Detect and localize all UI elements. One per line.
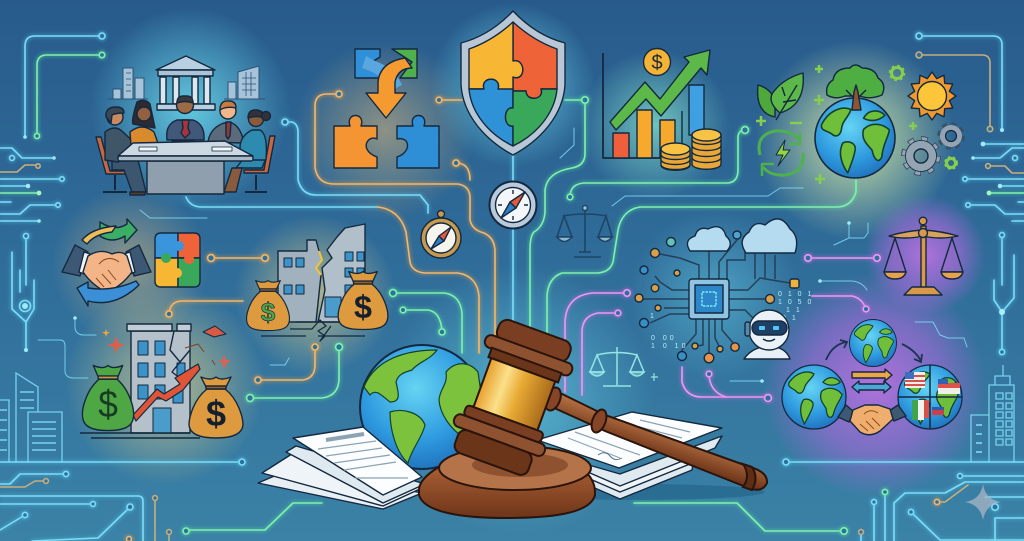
binary digits: 1	[650, 313, 654, 320]
cracked building with money bags, upper	[247, 224, 388, 341]
red quadrant	[513, 22, 557, 98]
icon: renewable energy arrows	[759, 131, 803, 176]
left skyline	[0, 373, 62, 462]
icon: large gear	[905, 140, 937, 172]
icon: sun	[908, 72, 956, 120]
clouds	[687, 219, 797, 253]
watermark star	[965, 484, 1001, 520]
documents left	[258, 427, 425, 509]
bar chart with coins	[603, 48, 721, 170]
icon: tan arrow	[82, 226, 116, 244]
shield with puzzle quadrants	[461, 11, 565, 155]
blue quadrant	[469, 79, 513, 146]
person 4	[208, 101, 244, 143]
documents right	[535, 412, 722, 499]
binary digits: 1 1	[786, 307, 802, 314]
global partnership cluster	[782, 320, 962, 435]
binary digits	[650, 291, 813, 350]
shield frame	[461, 11, 565, 155]
yellow quadrant	[469, 22, 523, 91]
handshake	[838, 405, 906, 435]
money bag green dollar	[247, 281, 289, 331]
africa and europe	[439, 364, 482, 436]
icon: colourful puzzle square	[155, 233, 200, 287]
icon: orange arrow	[366, 58, 412, 118]
head	[444, 314, 583, 480]
icon: blue arrow band	[362, 56, 402, 90]
money bag black dollar	[338, 272, 388, 330]
building	[127, 324, 191, 433]
table	[118, 141, 253, 194]
green quadrant	[506, 89, 557, 146]
icon: sleeves	[62, 245, 151, 276]
binary digits: 0 1	[782, 315, 798, 322]
robot	[744, 310, 790, 359]
building	[278, 224, 365, 322]
sound block	[419, 446, 595, 518]
sustainability cluster	[756, 65, 962, 184]
money bag tan	[189, 377, 243, 438]
icon: small gear	[940, 125, 962, 147]
chip	[689, 279, 729, 319]
binary digits: 1 0 10	[651, 343, 688, 350]
icon: plus signs	[756, 65, 917, 184]
money bag green: $	[98, 383, 118, 425]
icon: skyline	[108, 66, 265, 99]
person 2	[130, 100, 159, 146]
icon: blue arrow	[77, 281, 139, 306]
person 1	[105, 107, 146, 195]
curved arrows	[826, 340, 922, 362]
ground crack	[261, 320, 365, 341]
ground	[80, 433, 200, 438]
person 5	[224, 110, 270, 192]
compass	[490, 182, 536, 228]
cracked building with money bags, lower	[80, 324, 243, 438]
person 3	[167, 96, 204, 145]
icon: green corner	[392, 49, 417, 78]
gold balance scale	[884, 217, 963, 295]
chip traces	[643, 238, 790, 355]
globe top	[850, 320, 896, 366]
small balance scale	[557, 206, 612, 257]
icon: orange puzzle piece	[334, 116, 377, 168]
dollar coin: $	[651, 52, 663, 74]
icon: earth	[810, 93, 900, 183]
AI chip and clouds	[635, 219, 813, 363]
merging puzzle pieces icon	[334, 49, 439, 168]
growth arrow	[610, 50, 710, 130]
right skyline	[971, 365, 1014, 462]
icon: courthouse	[156, 56, 215, 110]
partnership handshake icon	[62, 219, 200, 306]
bars	[613, 85, 704, 158]
icon: blue corner	[355, 49, 392, 78]
handle	[542, 385, 767, 490]
small compass	[421, 210, 461, 258]
money bag green dollar: $	[261, 297, 276, 327]
binary digits: 1 0 5 0	[778, 299, 813, 306]
exchange arrows	[852, 369, 892, 393]
globe right with flags	[898, 365, 962, 429]
money bag green	[82, 365, 134, 431]
money bag tan: $	[206, 393, 226, 434]
chip nodes	[635, 231, 799, 363]
world globe	[360, 345, 484, 469]
north america	[364, 350, 437, 402]
binary digits: 0 00	[651, 335, 677, 342]
gavel shadow	[515, 484, 765, 500]
icon: green arrow	[100, 219, 137, 243]
globe left	[782, 365, 846, 429]
falling debris	[102, 326, 231, 369]
faint balance scale	[590, 347, 658, 386]
icon: hands	[83, 251, 132, 292]
icon: chairs	[96, 136, 275, 192]
coin stacks	[661, 129, 721, 170]
icon: blue puzzle piece	[397, 116, 439, 168]
red falling arrow	[133, 364, 200, 421]
money bag black dollar: $	[354, 289, 372, 325]
south america	[390, 411, 425, 463]
icon: leaves	[758, 73, 803, 120]
chart axes	[603, 53, 675, 158]
boardroom scene	[96, 56, 275, 195]
binary digits: 0 1 0 1	[778, 291, 813, 298]
gavel	[419, 314, 767, 518]
icon: tree	[827, 65, 884, 110]
icon: green gears	[890, 66, 957, 169]
